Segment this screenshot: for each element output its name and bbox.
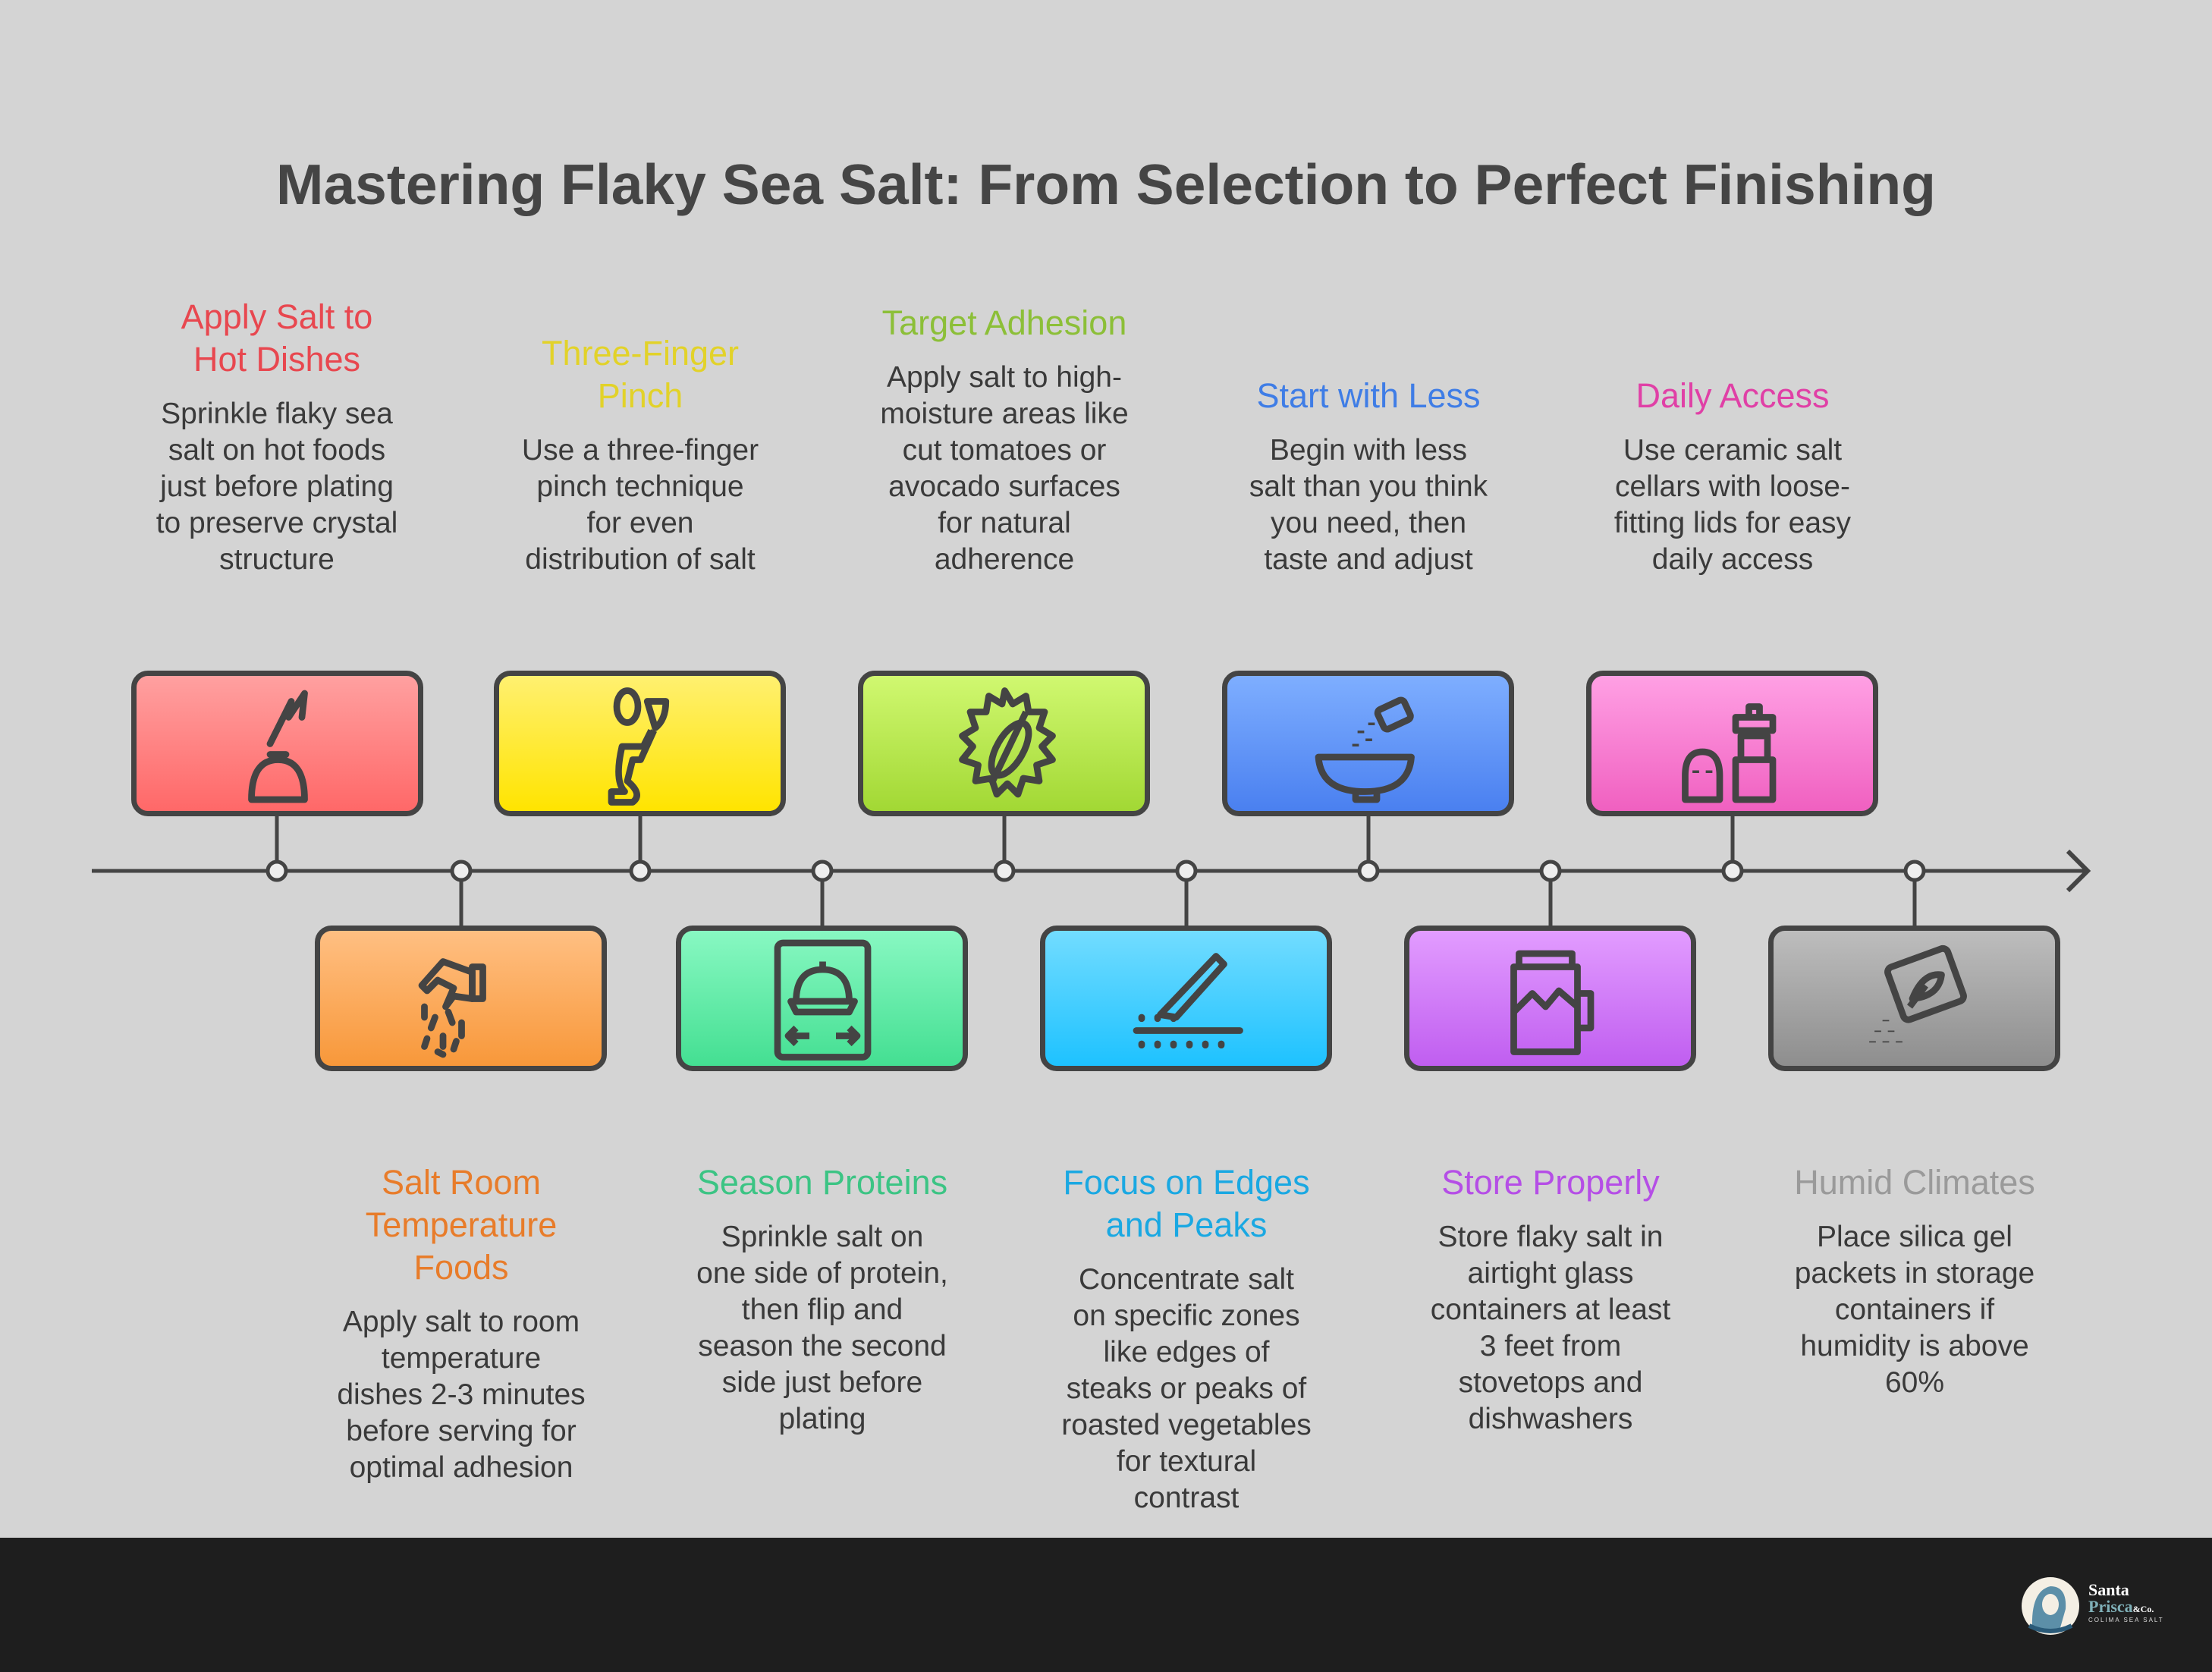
text: focus on edges xyxy=(1061,1163,1312,1514)
box: store properly xyxy=(1404,926,1696,1071)
text: start with less: Start with Less xyxy=(1256,376,1481,415)
text: season proteins: then flip and xyxy=(742,1293,903,1326)
text: humid climates: Place silica gel xyxy=(1817,1221,2012,1253)
text: daily access: Use ceramic salt xyxy=(1623,434,1842,467)
text: room temperature xyxy=(337,1163,586,1484)
text: target adhesion xyxy=(880,303,1129,576)
text: three-finger pinch: for even xyxy=(587,507,693,539)
text: store properly: dishwashers xyxy=(1469,1403,1632,1435)
text: store properly: containers at least xyxy=(1431,1293,1670,1326)
text: humid climates: packets in storage xyxy=(1795,1257,2034,1290)
text: target adhesion: adherence xyxy=(935,543,1074,576)
text: apply salt to hot dishes: Apply Salt to xyxy=(181,297,372,336)
text: three-finger pinch: Pinch xyxy=(598,376,683,415)
text: start with less xyxy=(1249,376,1488,576)
text: daily access: fitting lids for easy xyxy=(1614,507,1851,539)
text: start with less: taste and adjust xyxy=(1264,543,1473,576)
text: humid climates xyxy=(1794,1163,2035,1399)
text: focus on edges: on specific zones xyxy=(1073,1300,1300,1332)
text: season proteins xyxy=(696,1163,948,1435)
text: season proteins: one side of protein, xyxy=(696,1257,948,1290)
text: focus on edges: roasted vegetables xyxy=(1061,1409,1312,1441)
text: room temperature: Temperature xyxy=(366,1205,557,1244)
text: season proteins: Sprinkle salt on xyxy=(721,1221,923,1253)
box: humid climates xyxy=(1768,926,2060,1071)
text: room temperature: before serving for xyxy=(346,1415,577,1447)
text: room temperature: optimal adhesion xyxy=(350,1451,573,1484)
text: start with less: you need, then xyxy=(1271,507,1466,539)
text: target adhesion: Apply salt to high- xyxy=(887,361,1122,394)
logo: Prisca&Co. xyxy=(2088,1597,2154,1616)
text: focus on edges: contrast xyxy=(1134,1482,1239,1514)
text: three-finger pinch: Three-Finger xyxy=(542,334,739,372)
text: target adhesion: moisture areas like xyxy=(880,398,1129,430)
text: focus on edges: like edges of xyxy=(1103,1336,1269,1369)
text: daily access xyxy=(1614,376,1851,576)
text: humid climates: Humid Climates xyxy=(1794,1163,2035,1202)
text: humid climates: containers if xyxy=(1835,1293,1994,1326)
text: room temperature: Apply salt to room xyxy=(343,1306,580,1338)
text: focus on edges: steaks or peaks of xyxy=(1067,1372,1306,1405)
text: daily access: Daily Access xyxy=(1635,376,1830,415)
text: room temperature: temperature xyxy=(382,1342,541,1375)
text: three-finger pinch: pinch technique xyxy=(536,470,744,503)
logo: Santa xyxy=(2088,1580,2129,1599)
text: store properly xyxy=(1431,1163,1670,1435)
text: target adhesion: avocado surfaces xyxy=(888,470,1120,503)
text: target adhesion: for natural xyxy=(938,507,1071,539)
text: focus on edges: Focus on Edges xyxy=(1063,1163,1310,1202)
text: apply salt to hot dishes: to preserve crystal xyxy=(156,507,397,539)
text: daily access: cellars with loose- xyxy=(1615,470,1850,503)
text: target adhesion: cut tomatoes or xyxy=(903,434,1106,467)
text: start with less: salt than you think xyxy=(1249,470,1488,503)
text: apply salt to hot dishes: salt on hot foods xyxy=(168,434,385,467)
text: store properly: 3 feet from xyxy=(1480,1330,1621,1362)
text: store properly: Store flaky salt in xyxy=(1438,1221,1663,1253)
text: season proteins: Season Proteins xyxy=(697,1163,947,1202)
logo xyxy=(2022,1577,2164,1635)
footer xyxy=(0,1538,2212,1672)
text: three-finger pinch: distribution of salt xyxy=(525,543,756,576)
text: daily access: daily access xyxy=(1652,543,1813,576)
text: room temperature: dishes 2-3 minutes xyxy=(337,1378,586,1411)
text: three-finger pinch: Use a three-finger xyxy=(522,434,759,467)
text: apply salt to hot dishes: Hot Dishes xyxy=(193,340,360,379)
text: store properly: airtight glass xyxy=(1468,1257,1633,1290)
text: store properly: Store Properly xyxy=(1441,1163,1660,1202)
text: focus on edges: Concentrate salt xyxy=(1079,1263,1294,1296)
text: apply salt to hot dishes: just before plating xyxy=(160,470,394,503)
box: focus on edges xyxy=(1040,926,1332,1071)
box: start with less xyxy=(1222,671,1514,816)
text: three-finger pinch xyxy=(522,334,759,576)
text: humid climates: humidity is above xyxy=(1800,1330,2029,1362)
text: store properly: stovetops and xyxy=(1459,1366,1642,1399)
box: room temperature xyxy=(315,926,607,1071)
text: humid climates: 60% xyxy=(1885,1366,1944,1399)
text: season proteins: season the second xyxy=(698,1330,947,1362)
text: focus on edges: for textural xyxy=(1117,1445,1256,1478)
box: target adhesion xyxy=(858,671,1150,816)
text: target adhesion: Target Adhesion xyxy=(882,303,1126,342)
text: room temperature: Salt Room xyxy=(382,1163,541,1202)
text: apply salt to hot dishes: structure xyxy=(219,543,335,576)
box: season proteins xyxy=(676,926,968,1071)
title: Mastering Flaky Sea Salt: From Selection to Perfect Finishing xyxy=(276,152,1936,216)
box: daily access xyxy=(1586,671,1878,816)
text: season proteins: plating xyxy=(779,1403,866,1435)
text: focus on edges: and Peaks xyxy=(1106,1205,1267,1244)
icon: logo emblem xyxy=(2022,1577,2079,1635)
box: three-finger pinch xyxy=(494,671,786,816)
box: hot dishes xyxy=(131,671,423,816)
text: season proteins: side just before xyxy=(722,1366,922,1399)
text: apply salt to hot dishes xyxy=(156,297,397,576)
text: apply salt to hot dishes: Sprinkle flaky sea xyxy=(161,398,393,430)
logo: COLIMA SEA SALT xyxy=(2088,1617,2164,1623)
text: start with less: Begin with less xyxy=(1270,434,1467,467)
text: room temperature: Foods xyxy=(413,1248,509,1287)
